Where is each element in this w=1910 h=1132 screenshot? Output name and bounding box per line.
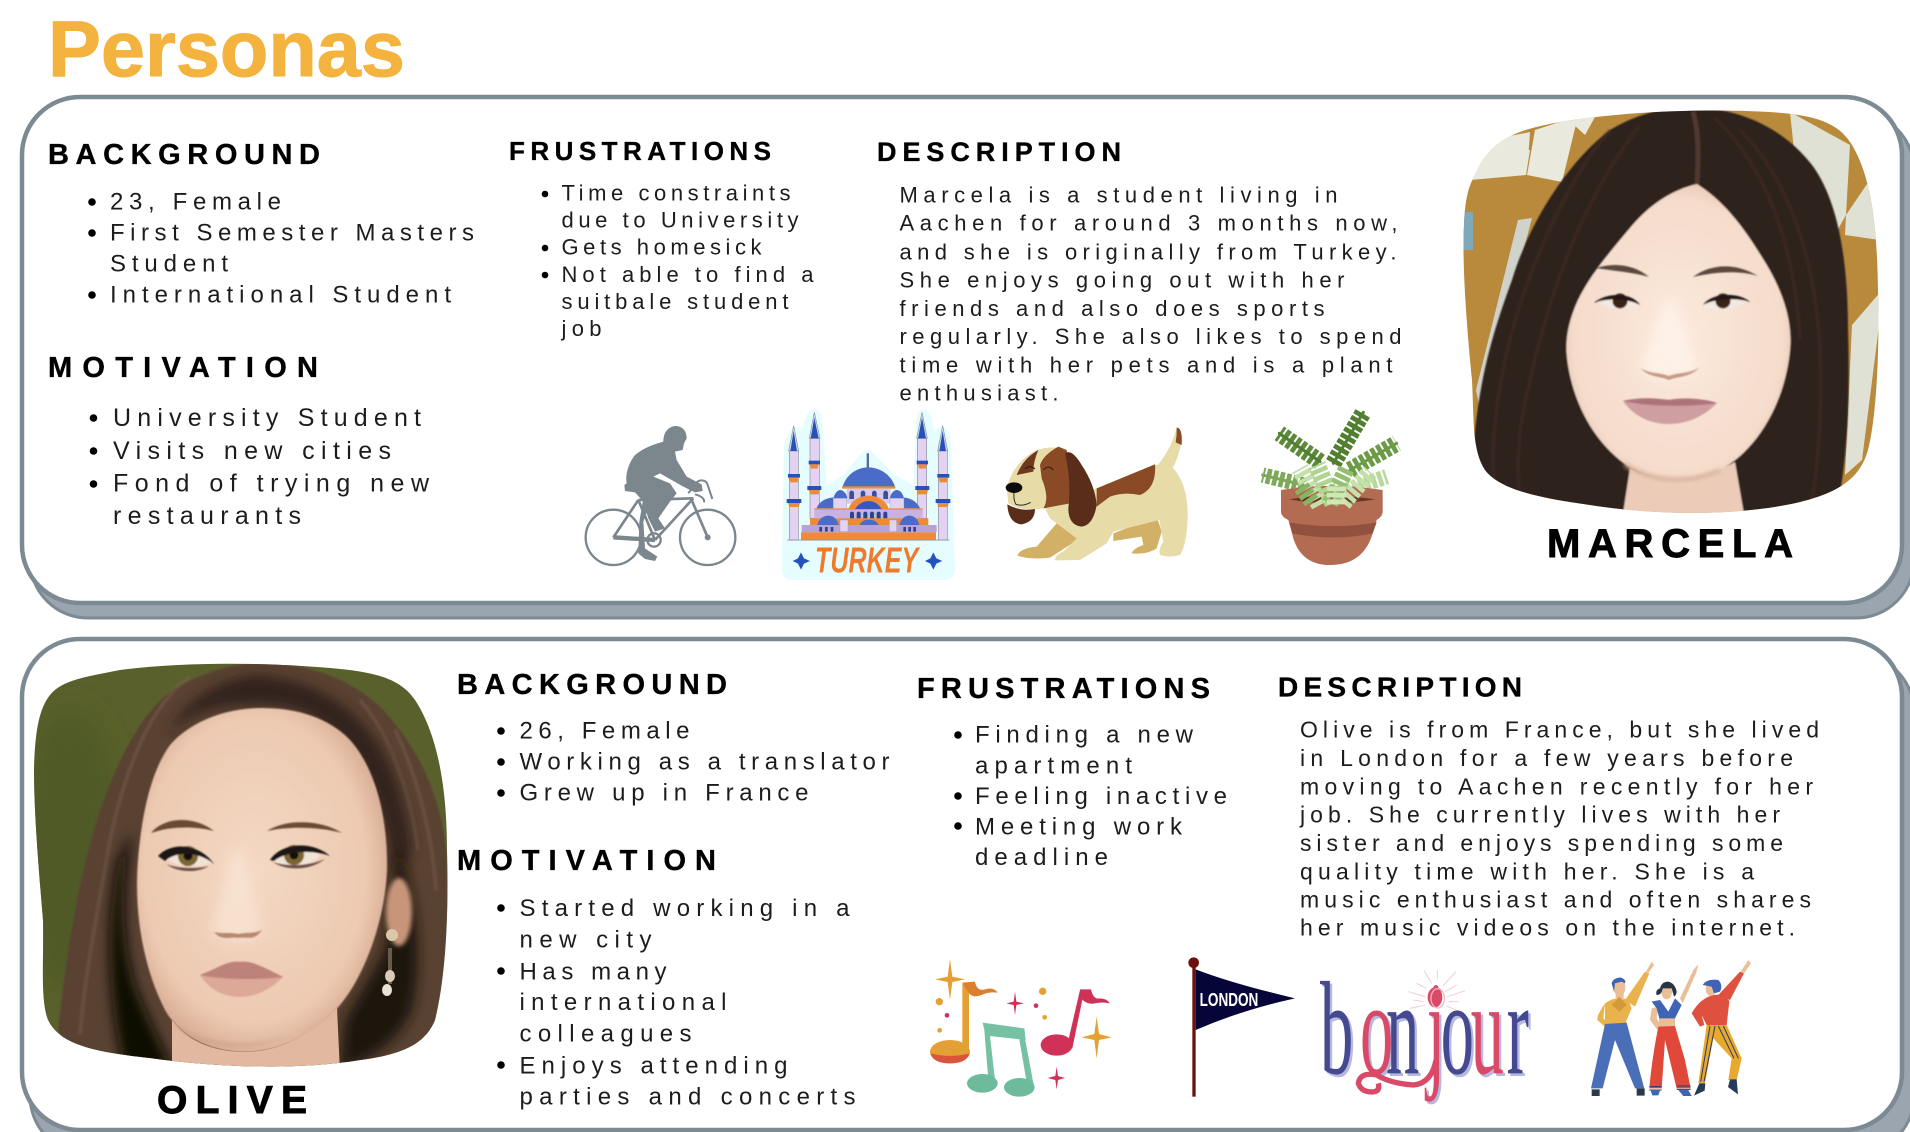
text block: motivation list bbox=[497, 895, 856, 1111]
text block: frustrations list: deadline bbox=[975, 844, 1108, 871]
text block: motivation list: parties and concerts bbox=[520, 1084, 856, 1111]
text block: motivation list: Fond of trying new bbox=[113, 470, 430, 498]
text block: motivation list: new city bbox=[520, 927, 652, 954]
text block: frustrations list: Gets homesick bbox=[562, 234, 762, 260]
icon: cyclist bbox=[586, 426, 735, 565]
dancer: woman in red trousers bbox=[1649, 964, 1698, 1096]
text block: motivation list: Has many bbox=[520, 958, 666, 985]
text block: background list: Working as a translator bbox=[520, 748, 890, 775]
text block: background list bbox=[497, 718, 890, 807]
text block: background list bbox=[88, 188, 474, 308]
text block: background list: Grew up in France bbox=[520, 780, 808, 807]
text block: description: music enthusiast and often shares bbox=[1300, 887, 1811, 913]
photo: Olive bbox=[20, 660, 450, 1072]
text block: description: She enjoys going out with her bbox=[900, 267, 1344, 292]
text block: frustrations list: Meeting work bbox=[975, 813, 1183, 840]
icon: dancers bbox=[1591, 960, 1751, 1096]
name: Olive: OLIVE bbox=[157, 1079, 307, 1122]
dancer: man in yellow shirt bbox=[1591, 962, 1654, 1096]
text block: motivation list: Started working in a bbox=[520, 895, 850, 922]
heading: background: BACKGROUND bbox=[48, 139, 320, 171]
text block: background list: 23, Female bbox=[110, 188, 281, 216]
text block: motivation list: international bbox=[520, 989, 726, 1016]
heading: frustrations: FRUSTRATIONS bbox=[917, 673, 1210, 705]
text block: description: Aachen for around 3 months now, bbox=[900, 211, 1398, 236]
text block: description: Olive is from France, but she lived bbox=[1300, 717, 1819, 743]
text block: description: and she is originally from Turkey. bbox=[900, 239, 1396, 264]
panel: Marcela bbox=[22, 97, 1910, 618]
icon: London pennant bbox=[1188, 957, 1295, 1097]
icon: music notes bbox=[930, 959, 1112, 1097]
eyebrows and eyes Olive bbox=[151, 820, 342, 871]
photo: Marcela bbox=[1460, 105, 1882, 525]
icon: Turkey mosque sticker: TURKEY bbox=[815, 540, 920, 581]
text block: frustrations list: job bbox=[560, 316, 602, 341]
icon: dog bbox=[1006, 428, 1188, 560]
text block: description: enthusiast. bbox=[900, 381, 1058, 406]
text block: frustrations list: Not able to find a bbox=[562, 262, 814, 287]
icon: bonjour lettering: bonjour bbox=[1320, 954, 1529, 1102]
text block: frustrations list: suitbale student bbox=[562, 289, 788, 314]
text block: frustrations list: Time constraints bbox=[562, 180, 790, 206]
heading: description: DESCRIPTION bbox=[877, 137, 1121, 167]
text block: description: job. She currently lives with her bbox=[1299, 802, 1780, 828]
heading: frustrations: FRUSTRATIONS bbox=[509, 136, 771, 166]
dancer: man in red shirt bbox=[1692, 960, 1751, 1096]
text block: description: sister and enjoys spending some bbox=[1300, 830, 1783, 856]
text block: motivation list: restaurants bbox=[113, 502, 301, 530]
text block: description: time with her pets and is a plant bbox=[900, 353, 1392, 378]
text block: description: Marcela is a student living in bbox=[900, 183, 1338, 208]
eyebrows and eyes Marcela bbox=[1594, 265, 1758, 309]
text block: background list: 26, Female bbox=[520, 718, 690, 745]
title: Personas bbox=[48, 4, 405, 93]
heading: background: BACKGROUND bbox=[457, 669, 727, 701]
text block: description: friends and also does sports bbox=[900, 296, 1324, 321]
text block: motivation list bbox=[90, 404, 430, 530]
text block: frustrations list: apartment bbox=[975, 752, 1132, 779]
text block: background list: First Semester Masters bbox=[110, 220, 474, 246]
name: Marcela: MARCELA bbox=[1547, 522, 1793, 566]
text block: motivation list: Enjoys attending bbox=[520, 1052, 788, 1079]
text block: description: her music videos on the internet. bbox=[1300, 915, 1795, 941]
text block: frustrations list: Finding a new bbox=[975, 722, 1194, 749]
icon: Turkey mosque sticker bbox=[782, 409, 955, 581]
text block: background list: International Student bbox=[110, 282, 451, 308]
text block: motivation list: colleagues bbox=[520, 1021, 692, 1048]
text block: frustrations list: due to University bbox=[562, 208, 798, 232]
text block: description bbox=[1299, 717, 1819, 941]
icon: bonjour lettering: bonjour bbox=[1322, 957, 1531, 1105]
heading: motivation: MOTIVATION bbox=[48, 352, 318, 384]
text block: frustrations list: Feeling inactive bbox=[975, 783, 1227, 810]
heading: motivation: MOTIVATION bbox=[457, 845, 716, 877]
text block: frustrations list bbox=[954, 722, 1227, 871]
text block: description: quality time with her. She is a bbox=[1300, 858, 1754, 884]
text block: description bbox=[900, 183, 1402, 406]
text block: background list: Student bbox=[110, 250, 228, 278]
text block: description: in London for a few years before bbox=[1300, 745, 1793, 771]
text block: description: moving to Aachen recently for her bbox=[1300, 773, 1813, 799]
text block: motivation list: University Student bbox=[113, 404, 421, 432]
text block: motivation list: Visits new cities bbox=[113, 437, 391, 465]
panel: Olive bbox=[20, 639, 1910, 1132]
heading: description: DESCRIPTION bbox=[1278, 672, 1522, 703]
text block: description: regularly. She also likes to spend bbox=[900, 324, 1402, 349]
text block: frustrations list bbox=[542, 180, 814, 341]
icon: potted plant bbox=[1263, 412, 1397, 565]
icon: London pennant: LONDON bbox=[1200, 989, 1258, 1010]
